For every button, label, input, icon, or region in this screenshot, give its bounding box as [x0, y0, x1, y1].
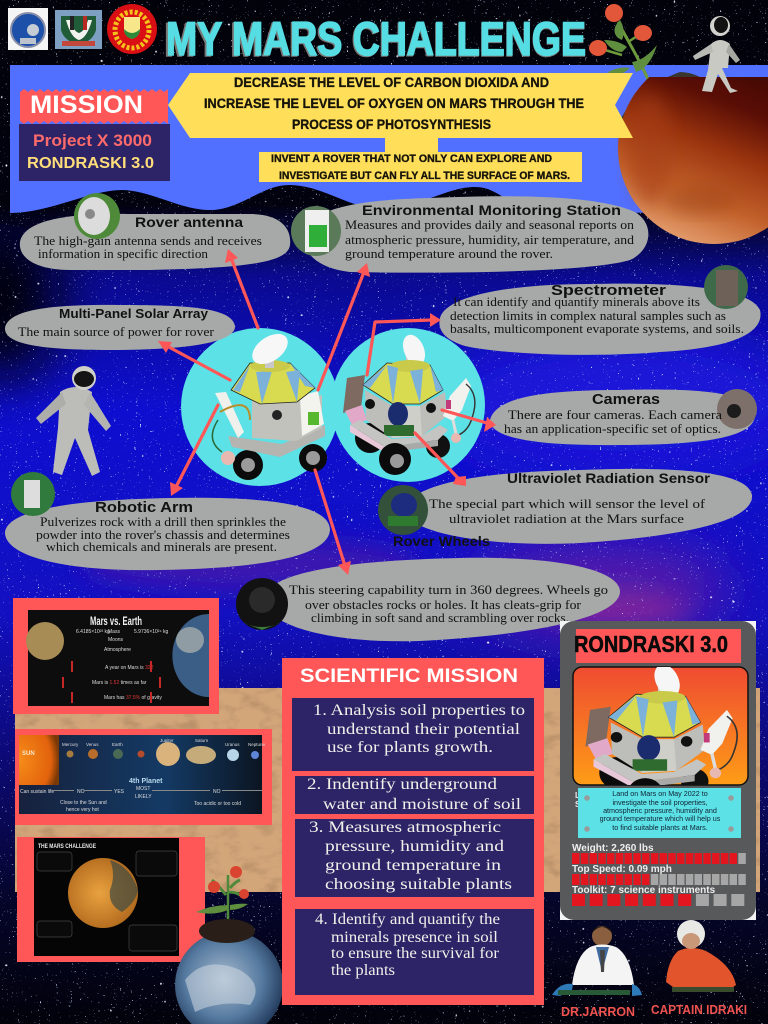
callout: ultraviolet radiation sensor: The special part which will sensor the level of — [429, 496, 706, 511]
earth with soil and plant — [175, 866, 283, 1024]
panel: mars vs earth: 5.9736×10²⁴ kg — [134, 629, 168, 635]
banner text: PROCESS OF PHOTOSYNTHESIS — [292, 116, 491, 132]
callout: spectrometer: It can identify and quantify minerals above its — [453, 294, 700, 309]
logo: red state crest — [107, 4, 157, 54]
plant with red flowers — [589, 4, 657, 84]
banner text: DECREASE THE LEVEL OF CARBON DIOXIDA AND — [234, 74, 549, 90]
icon: robotic arm — [11, 472, 55, 516]
callout: ultraviolet radiation sensor: Ultraviolet Radiation Sensor — [507, 470, 711, 486]
panel: solar system: Can sustain life — [20, 789, 54, 795]
panel: solar system: YES — [114, 789, 125, 795]
rover stats card: L — [575, 791, 580, 800]
callout: rover antenna: information in specific direction — [38, 246, 208, 261]
panel: solar system: hence very hot — [66, 807, 99, 813]
item 3: choosing suitable plants — [325, 876, 512, 893]
callout: robotic arm: Robotic Arm — [95, 499, 193, 516]
panel: solar system: Saturn — [195, 738, 209, 743]
icon: spectrometer — [704, 265, 748, 309]
callout: spectrometer — [439, 282, 761, 355]
project name box: RONDRASKI 3.0 — [27, 155, 154, 172]
item 2 — [307, 776, 522, 813]
callout: environmental monitoring station — [304, 196, 648, 273]
panel: the mars challenge: THE MARS CHALLENGE — [38, 844, 96, 850]
panel: solar system: Jupiter — [160, 738, 174, 743]
logo: school shield — [55, 10, 102, 49]
stat: weight — [572, 843, 746, 864]
callout: spectrometer: Spectrometer — [551, 282, 666, 299]
icon: monitoring station — [291, 206, 341, 256]
card description: Land on Mars on May 2022 to — [612, 789, 708, 798]
panel: mars vs earth: Mars has 37.5% of gravity — [104, 695, 162, 701]
right rover — [343, 331, 475, 475]
panel: solar system: Neptune — [248, 742, 266, 747]
callout: cameras: There are four cameras. Each camera — [508, 407, 722, 422]
card rover photo — [572, 666, 749, 786]
callout: spectrometer: basalts, multicomponent evaporate systems, and soils. — [450, 321, 744, 336]
callout: robotic arm: Pulverizes rock with a drill then sprinkles the — [40, 514, 286, 529]
card description: atmospheric pressure, humidity and — [603, 806, 717, 815]
callout: cameras: has an application-specific set of optics. — [504, 421, 721, 436]
title: MY MARS CHALLENGE — [164, 13, 586, 66]
callout: spectrometer: detection limits in complex natural samples such as — [450, 308, 726, 323]
panel: mars vs earth: A year on Mars is 322 — [105, 665, 154, 671]
item 4: to ensure the survival for — [331, 945, 500, 962]
callout: wheels: climbing in soft sand and scrambling over rocks. — [311, 610, 569, 625]
panel: solar system: MOST — [136, 786, 150, 792]
panel: mars vs earth: Mars vs. Earth — [90, 614, 142, 628]
banner text — [204, 74, 584, 182]
rover stats card: S — [575, 800, 581, 809]
banner text: INVESTIGATE BUT CAN FLY ALL THE SURFACE OF MARS. — [279, 170, 570, 182]
panel: mars vs earth: Mass — [108, 629, 120, 635]
panel: mars vs earth: Mars is 1.52 times as far — [92, 680, 147, 686]
item 3: ground temperature in — [325, 857, 501, 874]
panel: solar system: Earth — [112, 742, 123, 747]
item 2: water and moisture of soil — [323, 796, 522, 813]
panel: solar system: NO — [77, 789, 85, 795]
callout: robotic arm: which chemicals and minerals are present. — [46, 539, 277, 554]
item 1: understand their potential — [327, 721, 521, 738]
stat: top speed: Top Speed: 0.09 mph — [572, 864, 672, 875]
callout: rover antenna — [20, 214, 290, 270]
panel: the mars challenge — [17, 837, 205, 962]
item 3: 3. Measures atmospheric — [309, 819, 501, 836]
mars planet — [616, 72, 768, 244]
callout: multi-panel solar array: The main source of power for rover — [18, 324, 215, 339]
panel: mars vs earth — [13, 598, 219, 714]
heading: SCIENTIFIC MISSION — [300, 666, 518, 687]
callout: rover antenna: The high-gain antenna sends and receives — [34, 233, 262, 248]
callout: robotic arm — [5, 498, 330, 570]
wheels heading: Rover Wheels — [393, 533, 490, 549]
item 1 — [313, 702, 525, 756]
callout: rover antenna: Rover antenna — [135, 214, 243, 230]
callout: multi-panel solar array: Multi-Panel Solar Array — [59, 307, 208, 321]
card description — [578, 788, 741, 838]
card title: RONDRASKI 3.0 — [574, 631, 728, 657]
item 3 — [309, 819, 512, 893]
astronaut on mars — [693, 16, 740, 93]
title: MY MARS CHALLENGE — [166, 12, 586, 65]
stat: toolkit: Toolkit: 7 science instruments — [572, 885, 716, 896]
panel: solar system: 4th Planet — [129, 778, 163, 785]
panel: solar system: Mercury — [62, 742, 79, 747]
panel: scientific mission — [282, 658, 544, 1005]
panel: solar system: SUN — [22, 751, 35, 757]
mission header panel — [10, 65, 768, 213]
item 3: pressure, humidity and — [325, 838, 504, 855]
item 4: minerals presence in soil — [331, 929, 499, 946]
portrait: Dr. Jarron — [552, 926, 642, 996]
card description: to find suitable plants at Mars. — [612, 823, 708, 832]
rover circles — [181, 328, 485, 486]
callout: wheels — [265, 558, 620, 641]
project name box: Project X 3000 — [33, 131, 152, 150]
panel: solar system: Uranus — [225, 742, 240, 747]
callout: environmental monitoring station: Measures and provides daily and seasonal reports on — [345, 217, 635, 232]
rover stats card — [560, 621, 756, 920]
stat: top speed — [572, 864, 746, 885]
item 1: 1. Analysis soil properties to — [313, 702, 525, 719]
icon: camera — [717, 389, 757, 429]
panel: solar system: Venus — [86, 742, 99, 747]
project name box — [19, 124, 170, 181]
item 1: use for plants growth. — [327, 739, 493, 756]
item 2: 2. Indentify underground — [307, 776, 497, 793]
stat: weight: Weight: 2,260 lbs — [572, 843, 654, 854]
icon: rover antenna — [74, 193, 120, 239]
mission ribbon: MISSION — [30, 91, 143, 119]
callout: wheels: over obstacles rocks or holes. It has cleats-grip for — [305, 597, 582, 612]
callout: ultraviolet radiation sensor — [405, 469, 752, 544]
callout: ultraviolet radiation sensor: ultraviolet radiation at the Mars surface — [449, 511, 684, 526]
item 4 — [315, 911, 500, 979]
callout: environmental monitoring station: Environmental Monitoring Station — [362, 202, 621, 218]
panel: mars vs earth: Atmosphere — [104, 647, 131, 653]
mars surface texture — [15, 688, 760, 892]
callout: environmental monitoring station: ground temperature around the rover. — [345, 246, 553, 261]
card description: investigate the soil properties, — [612, 798, 708, 807]
mission ribbon — [20, 89, 168, 124]
panel: solar system — [15, 729, 272, 825]
callout: robotic arm: powder into the rover's chassis and determines — [36, 527, 290, 542]
stat: toolkit — [572, 885, 744, 906]
callout: environmental monitoring station: atmospheric pressure, humidity, air temperature, and — [345, 232, 635, 247]
arrows from rover to labels — [158, 249, 496, 575]
icon: wheel — [236, 578, 288, 630]
panel: solar system: LIKELY — [135, 794, 152, 800]
panel: solar system: Close to the Sun and — [60, 800, 107, 806]
banner text: INCREASE THE LEVEL OF OXYGEN ON MARS THROUGH THE — [204, 95, 584, 111]
panel: mars vs earth: 6.4185×10²³ kg — [76, 629, 110, 635]
banner text: INVENT A ROVER THAT NOT ONLY CAN EXPLORE AND — [271, 153, 552, 165]
logo: observatory crest — [8, 8, 48, 50]
callout: wheels: This steering capability turn in 360 degrees. Wheels go — [289, 582, 608, 597]
item 4: 4. Identify and quantify the — [315, 911, 500, 928]
panel: solar system: NO — [213, 789, 221, 795]
portrait: Captain Idraki — [666, 920, 736, 992]
left rover — [212, 328, 327, 480]
callout: cameras — [490, 389, 757, 445]
card description: ground temperature which will help us — [600, 814, 721, 823]
icon: uv sensor — [378, 485, 428, 535]
mission statement banner — [168, 73, 633, 182]
label: Dr. Jarron: DR.JARRON — [561, 1004, 635, 1019]
callout: multi-panel solar array — [5, 305, 235, 350]
label: Captain Idraki: CAPTAIN IDRAKI — [651, 1002, 747, 1017]
callout: cameras: Cameras — [592, 392, 660, 408]
panel: mars vs earth: Moons — [108, 637, 124, 643]
panel: solar system: Too acidic or too cold — [194, 801, 241, 807]
item 4: the plants — [331, 962, 395, 979]
astronaut floating — [36, 366, 111, 476]
